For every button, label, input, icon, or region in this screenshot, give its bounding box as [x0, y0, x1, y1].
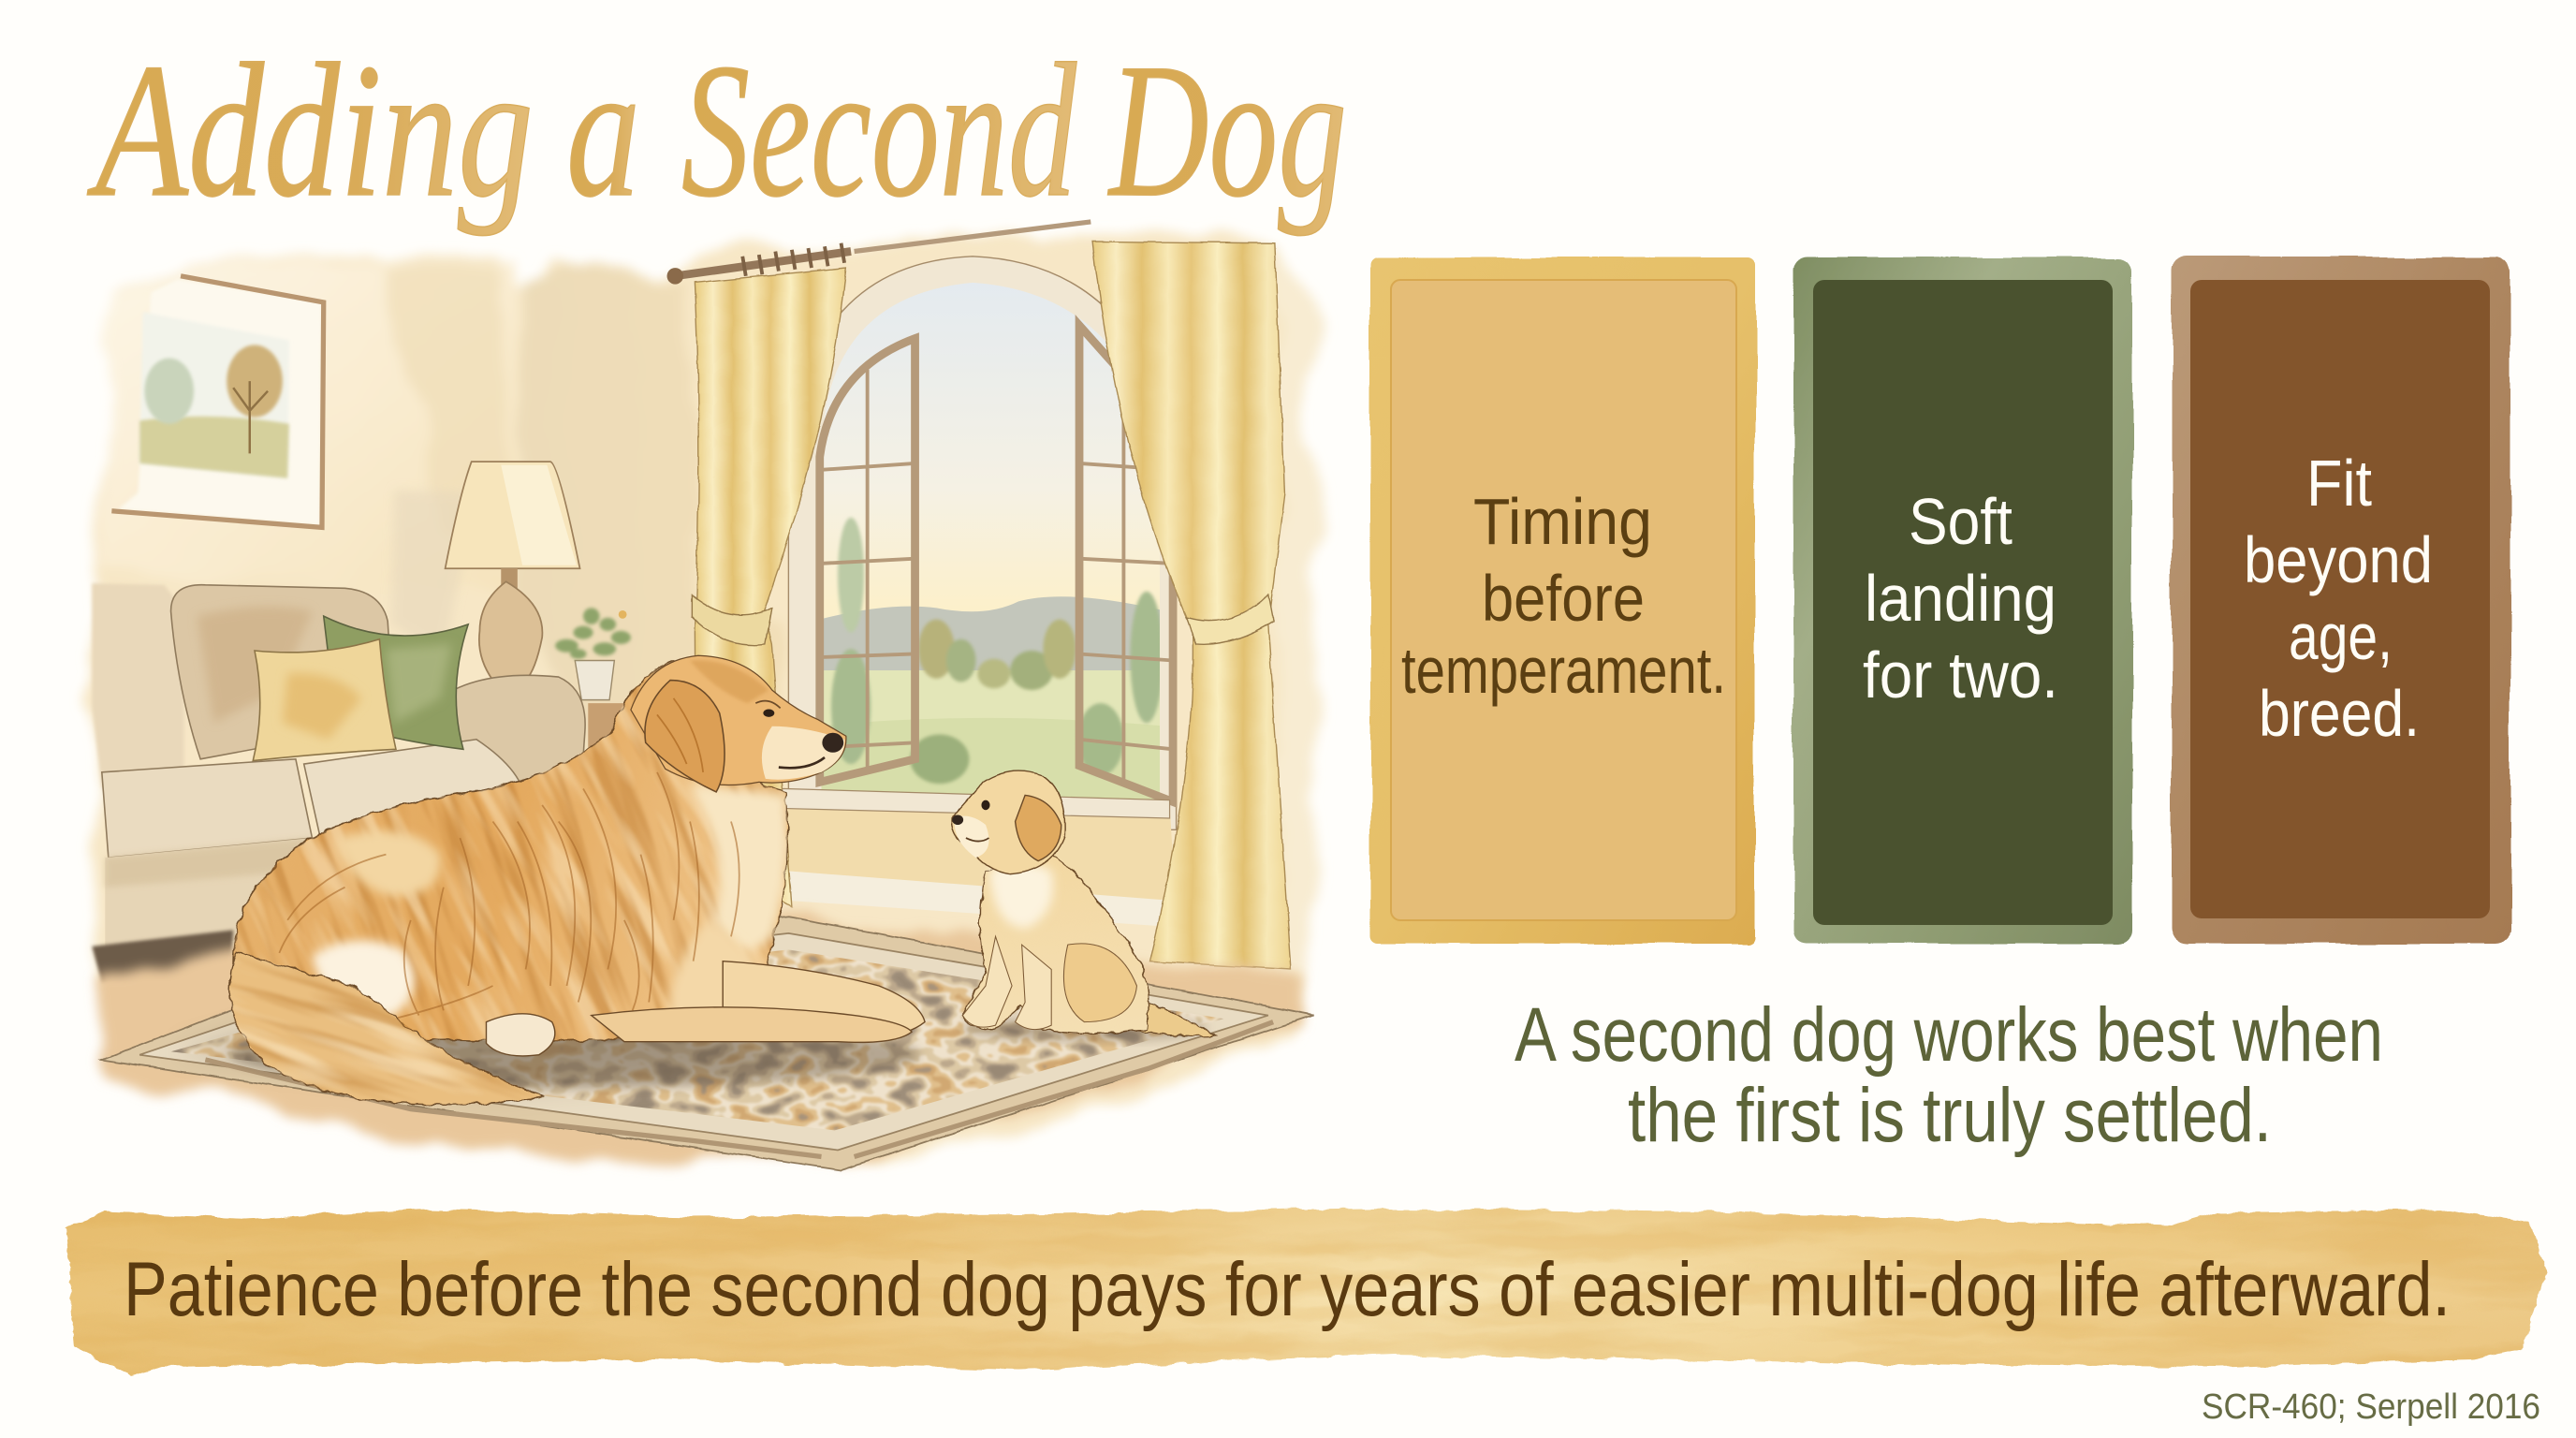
plant on side table [555, 608, 637, 772]
green cushion [324, 616, 468, 749]
banner: takeaway [56, 1203, 2555, 1381]
subtitle message [1515, 992, 2383, 1158]
lamp [391, 462, 580, 681]
tail [228, 951, 545, 1107]
nose [822, 733, 843, 753]
card 2 border [1793, 257, 2132, 944]
wall picture [111, 276, 324, 527]
title: a [566, 24, 640, 237]
puppy golden retriever [951, 771, 1216, 1042]
card: fit beyond age, breed [2172, 257, 2510, 944]
subtitle message: the first is truly settled. [1628, 1073, 2272, 1158]
window with landscape view [782, 257, 1177, 927]
card: soft landing for two [1793, 257, 2132, 944]
puppy front legs [962, 936, 1051, 1030]
mouth [779, 757, 825, 768]
card 3 text: breed. [2259, 677, 2420, 750]
card 2 fill [1813, 280, 2113, 925]
dog body silhouette [233, 661, 787, 1042]
illustration: two golden retrievers in a living room [77, 219, 1331, 1174]
card 3 text [2244, 447, 2433, 750]
right curtain [1092, 242, 1291, 969]
card 1 text: Timing [1473, 485, 1652, 558]
right open casement [1079, 325, 1173, 801]
puppy head [951, 771, 1065, 874]
card 3 text: beyond [2244, 523, 2433, 596]
shadow under dog [230, 1022, 920, 1088]
puppy shadow [961, 1016, 1208, 1042]
card 2 text: landing [1865, 562, 2056, 635]
card 2 text: for two. [1863, 638, 2058, 712]
title: Second [681, 24, 1076, 237]
card 1 fill [1391, 280, 1736, 920]
subtitle message: A second dog works best when [1515, 992, 2383, 1078]
card 1 text [1401, 485, 1726, 707]
left open casement [820, 339, 915, 782]
card 2 text [1863, 485, 2058, 712]
card 3 fill [2190, 280, 2490, 918]
card: timing before temperament [1370, 257, 1755, 944]
puppy tail [1117, 990, 1216, 1035]
banner wash [56, 1203, 2555, 1381]
big golden retriever [227, 655, 926, 1107]
sofa [92, 583, 585, 990]
title: Dog [1107, 24, 1347, 237]
puppy face [981, 800, 990, 810]
card 1 text: before [1482, 562, 1645, 635]
card 3 border [2172, 257, 2510, 944]
back paw [486, 1014, 555, 1056]
card 3 text: Fit [2306, 447, 2372, 520]
title: Adding [87, 24, 534, 237]
window sill and wainscot [785, 792, 1177, 914]
source citation: SCR-460; Serpell 2016 [2202, 1387, 2540, 1427]
head [631, 655, 846, 785]
fur strokes [279, 772, 739, 1019]
puppy ear [1016, 795, 1061, 861]
card 1 border [1370, 257, 1755, 944]
puppy body [962, 855, 1149, 1034]
rug [102, 917, 1314, 1170]
dog fur texture [234, 661, 787, 1041]
room walls wash [92, 233, 1314, 1158]
card 2 text: Soft [1909, 485, 2012, 558]
card 3 text: age, [2289, 600, 2393, 673]
floor [95, 912, 1314, 1164]
yellow cushion [253, 639, 396, 761]
curtain rod [667, 222, 1090, 285]
left curtain [692, 268, 846, 907]
title [87, 24, 1347, 237]
front legs [723, 961, 925, 1035]
ear [645, 681, 724, 792]
eye [763, 709, 774, 717]
card 1 text: temperament. [1401, 634, 1726, 707]
